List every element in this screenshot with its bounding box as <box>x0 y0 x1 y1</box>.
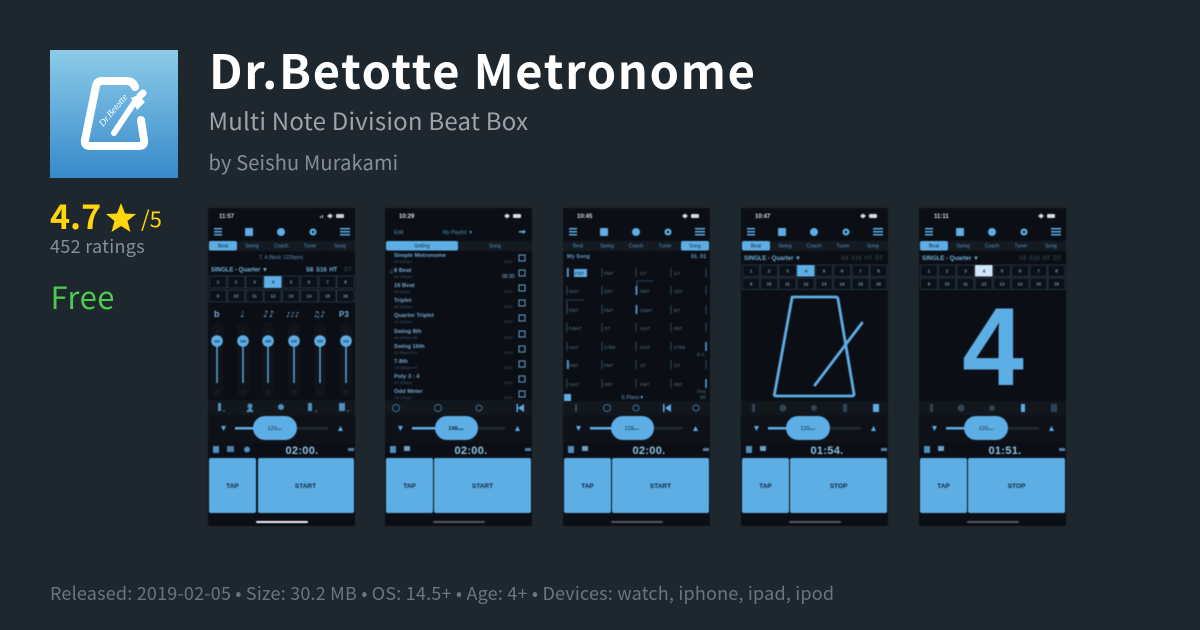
chord chart: Gm7 <box>569 289 579 294</box>
timer row <box>924 445 1065 457</box>
beat grid: 10 <box>233 294 239 298</box>
playlist rows: Odd Meter <box>394 389 423 395</box>
status bar: 11:11 <box>934 214 949 220</box>
tabs: Coach <box>629 244 643 250</box>
volume sliders: v <box>216 389 218 394</box>
beat grid: 9 <box>750 282 753 286</box>
tempo slider <box>398 416 520 440</box>
chord chart: FM7 <box>575 271 585 276</box>
note row: b <box>214 309 220 319</box>
timer row <box>746 445 887 457</box>
volume sliders: ^ <box>293 329 295 334</box>
volume sliders: 100 <box>343 339 349 343</box>
transport icons <box>575 404 699 412</box>
playlist rows: 00:30 <box>502 274 515 280</box>
subtitle: Multi Note Division Beat Box <box>208 102 528 136</box>
volume sliders: ^ <box>267 329 269 334</box>
tabs: Tuner <box>304 244 317 250</box>
playlist rows: Quarter Triplet <box>394 313 434 319</box>
tabs <box>385 241 532 251</box>
chord chart: G7 <box>640 363 647 368</box>
status bar: 11:57 <box>219 214 235 220</box>
chord chart: FM7 <box>604 363 614 368</box>
volume sliders: 100 <box>291 339 297 343</box>
price: Free <box>50 273 115 318</box>
chord chart: FM7 <box>569 363 579 368</box>
beat grid: 3 <box>786 268 789 274</box>
volume sliders: ^ <box>242 329 244 334</box>
volume sliders: 100 <box>265 339 271 343</box>
chord chart: FM7 <box>640 382 650 387</box>
note row: ♪♪ <box>263 310 274 320</box>
volume sliders: ^ <box>319 329 321 334</box>
tempo slider <box>576 416 698 440</box>
tabs: Song <box>1045 244 1057 250</box>
chord chart: Fdim7 <box>569 326 582 331</box>
playlist rows: Simple Metronome <box>394 253 447 259</box>
tabs: Song <box>867 244 879 250</box>
tabs: Swing <box>956 244 970 250</box>
volume sliders: v <box>319 389 321 394</box>
song header: My Song <box>567 254 590 260</box>
beat grid: 7 <box>859 268 862 274</box>
chord chart: FM7 <box>604 308 614 313</box>
timer row <box>390 445 531 457</box>
timer row <box>213 445 354 457</box>
note row: P3 <box>339 310 349 319</box>
beat grid: 16 <box>343 294 348 298</box>
beat grid: 6 <box>841 268 844 274</box>
playlist rows: Swing 8th <box>394 329 422 335</box>
tempo slider: 120bpm <box>800 426 816 432</box>
START button: START <box>650 483 671 490</box>
playlist rows: 4/4 96bpm <box>394 290 410 294</box>
timer row: 02:00. <box>632 445 666 457</box>
mode row <box>211 268 352 274</box>
beat grid: 11 <box>785 282 790 286</box>
playlist rows: Triplet <box>394 298 411 304</box>
beat grid: 3 <box>964 268 967 274</box>
playlist rows: 00:30 <box>504 260 513 264</box>
beat grid: 7 <box>1037 268 1040 274</box>
tabs: Tuner <box>837 244 850 250</box>
home indicator <box>433 521 485 523</box>
tempo slider: 148bpm <box>448 426 464 432</box>
beat grid: 8 <box>344 280 347 284</box>
playlist rows: 00:30 <box>504 305 513 309</box>
chord chart: G7 <box>674 271 681 276</box>
status bar: 10:45 <box>577 214 593 220</box>
playlist rows: Swing 16th <box>394 344 425 350</box>
beat grid: 15 <box>858 282 863 286</box>
rating <box>50 190 162 239</box>
beat grid: 16 <box>876 282 881 286</box>
sound icons <box>218 403 349 412</box>
chord chart: C7b9 <box>674 345 685 350</box>
beat grid <box>920 265 1065 290</box>
tabs <box>208 241 355 251</box>
tabs <box>919 241 1066 251</box>
tabs: Tuner <box>1015 244 1028 250</box>
tempo slider: 120bpm <box>978 426 994 432</box>
beat grid: 10 <box>944 282 950 286</box>
beat grid: 6 <box>1019 268 1022 274</box>
sound label: E.Piano▼ <box>622 395 644 401</box>
timer row <box>568 445 709 457</box>
tabs <box>741 241 888 251</box>
status bar <box>934 214 1055 220</box>
tabs: Coach <box>985 244 999 250</box>
status bar <box>577 214 699 220</box>
beat grid: 7 <box>326 280 329 284</box>
chord chart: Db7 <box>674 382 683 387</box>
note row <box>214 309 349 320</box>
playlist rows: 16 Beat <box>394 283 415 289</box>
playlist rows: 00:30 <box>504 381 513 385</box>
TAP button: TAP <box>937 483 950 490</box>
beat grid: 13 <box>999 282 1005 286</box>
beat grid <box>742 265 887 290</box>
note row: ♪♪♪ <box>286 311 299 319</box>
tabs: Beat <box>218 244 229 250</box>
tabs: Tuner <box>659 244 672 250</box>
volume sliders: 100 <box>317 339 323 343</box>
volume sliders: v <box>345 389 347 394</box>
status bar <box>755 214 877 220</box>
beat grid: 13 <box>821 282 827 286</box>
playlist rows: 8 Beat <box>394 268 411 274</box>
chord chart: Am7 <box>569 345 579 350</box>
tabs: Song <box>334 244 346 250</box>
toolbar icons <box>569 228 705 236</box>
home indicator <box>967 521 1019 523</box>
tabs: Swing <box>600 244 614 250</box>
tempo slider: 120bpm <box>267 426 283 432</box>
beat grid: 5 <box>823 268 826 274</box>
chord chart: G7 <box>604 326 611 331</box>
tempo slider <box>932 416 1054 440</box>
volume sliders: ^ <box>345 329 347 334</box>
playlist rows: 00:30 <box>504 351 513 355</box>
beat grid: 12 <box>803 282 809 286</box>
STOP button: STOP <box>830 483 848 490</box>
beat grid: 10 <box>766 282 772 286</box>
rating: 4.7 <box>50 190 101 239</box>
beat grid: 11 <box>252 294 257 298</box>
beat grid: 9 <box>217 294 220 298</box>
beat grid: 1 <box>928 268 931 274</box>
beat grid: 4 <box>272 280 275 284</box>
tempo slider <box>754 416 876 440</box>
screenshot 3: chord song <box>562 208 710 526</box>
sound icons <box>752 404 879 412</box>
screenshot 4: metronome <box>740 208 888 526</box>
beat grid: 13 <box>288 294 294 298</box>
beat grid: 5 <box>1001 268 1004 274</box>
playlist rows: 4/4 96bpm S16 <box>394 351 417 355</box>
app icon: Dr.Betotte <box>97 93 130 130</box>
ratings count: 452 ratings <box>50 233 145 259</box>
home indicator <box>611 521 663 523</box>
TAP button: TAP <box>226 483 239 490</box>
playlist rows: 00:30 <box>504 290 513 294</box>
chord chart: G7 <box>674 363 681 368</box>
tabs: Swing <box>245 244 259 250</box>
beat grid: 1 <box>217 280 220 284</box>
toolbar icons <box>214 228 350 236</box>
beat grid: 14 <box>839 282 845 286</box>
beat grid: 8 <box>1055 268 1058 274</box>
volume sliders <box>211 322 352 398</box>
TAP button <box>209 458 256 513</box>
TAP button <box>564 458 611 513</box>
tempo slider <box>221 416 343 440</box>
beat grid: 11 <box>963 282 968 286</box>
beat grid: 14 <box>1017 282 1023 286</box>
mode row: DT <box>344 268 352 274</box>
chord chart: Gb7 <box>604 382 613 387</box>
beat grid: 9 <box>928 282 931 286</box>
chord chart: G7b9 <box>604 345 616 350</box>
volume sliders: v <box>267 389 269 394</box>
STOP button <box>790 458 887 513</box>
beat grid <box>210 276 354 302</box>
tabs: Beat <box>573 244 584 250</box>
chord chart: FM7 <box>604 271 614 276</box>
status bar: 10:29 <box>399 214 415 220</box>
playlist rows: 00:30 <box>504 320 513 324</box>
chord chart: G7 <box>640 271 647 276</box>
volume sliders: ^ <box>216 329 218 334</box>
playlist rows: 4/4 120bpm <box>394 260 412 264</box>
screenshot 5: big beat number <box>918 208 1066 526</box>
playlist rows: 7/8 180bpm HT <box>394 366 417 370</box>
mode row <box>744 256 883 262</box>
tabs: Song <box>689 244 701 250</box>
beat grid: 1 <box>750 268 753 274</box>
TAP button: TAP <box>759 483 772 490</box>
beat grid: 6 <box>308 280 311 284</box>
author: by Seishu Murakami <box>208 147 398 176</box>
chord chart: Gm7 <box>569 382 579 387</box>
volume sliders: 100 <box>240 339 246 343</box>
playlist rows <box>389 253 525 400</box>
status bar <box>219 214 344 220</box>
title: Dr.Betotte Metronome <box>209 34 757 103</box>
beat grid: 5 <box>290 280 293 284</box>
playlist rows: 7/8 100bpm <box>394 396 412 400</box>
beat grid: 2 <box>946 268 949 274</box>
playlist header: Edit <box>394 230 404 236</box>
beat grid: 14 <box>306 294 312 298</box>
chord chart: FM7 <box>640 289 650 294</box>
beat grid: 15 <box>325 294 330 298</box>
note row: ♩ <box>240 310 244 320</box>
screenshot 1: beat mixer <box>208 208 356 526</box>
sound label: ±0 <box>700 395 706 401</box>
tabs <box>563 241 710 251</box>
START button <box>434 458 531 513</box>
chord chart: Gb7 <box>604 289 613 294</box>
beat grid: 3 <box>253 280 256 284</box>
mode row: S8 S16 HT DT <box>841 256 883 262</box>
chord chart: D.C. <box>697 352 706 357</box>
STOP button: STOP <box>1008 483 1026 490</box>
chord chart: Gm7 <box>640 345 650 350</box>
TAP button <box>920 458 967 513</box>
song header: 01. 01 <box>691 254 706 260</box>
mode row: SINGLE - Quarter ▼ <box>922 256 979 262</box>
transport icons <box>392 404 524 412</box>
TAP button: TAP <box>403 483 416 490</box>
START button: START <box>472 483 493 490</box>
playlist rows: 00:30 <box>504 336 513 340</box>
beat grid: 2 <box>768 268 771 274</box>
START button: START <box>295 483 316 490</box>
playlist rows: 4/4 100bpm <box>394 320 412 324</box>
chord chart: FM7 <box>569 308 579 313</box>
rating: /5 <box>141 202 162 234</box>
chord chart: Fine <box>697 389 706 394</box>
volume sliders: 100 <box>214 339 220 343</box>
note row: ♫♪ <box>313 310 325 319</box>
chord chart: Eb7 <box>674 326 683 331</box>
playlist header <box>394 230 526 236</box>
sound label <box>564 394 706 401</box>
tabs: Coach <box>274 244 288 250</box>
playlist rows: 4/4 148bpm <box>394 275 412 279</box>
status bar: 10:47 <box>755 214 771 220</box>
playlist rows: 00:30 <box>504 396 513 400</box>
beat grid: 16 <box>1054 282 1059 286</box>
sound icons <box>930 404 1057 412</box>
playlist rows: 4/4 100bpm <box>394 381 412 385</box>
tabs: Setting <box>414 244 430 250</box>
START button <box>612 458 709 513</box>
app icon <box>50 50 178 178</box>
chord chart: Gm7 <box>640 326 650 331</box>
big beat number: 4 <box>962 285 1024 409</box>
playlist rows: Poly 3 : 4 <box>394 374 420 380</box>
TAP button <box>386 458 433 513</box>
timer row: 02:00. <box>454 445 488 457</box>
volume sliders: v <box>242 389 244 394</box>
home indicator <box>256 521 308 523</box>
mode row: SINGLE - Quarter ▼ <box>211 268 268 274</box>
tabs: Beat <box>929 244 940 250</box>
metronome graphic <box>774 297 862 396</box>
tabs: Song <box>489 244 501 250</box>
chord chart: Gb7 <box>674 289 683 294</box>
beat grid: 12 <box>981 282 987 286</box>
toolbar icons <box>925 228 1061 236</box>
START button <box>258 458 354 513</box>
chord chart <box>567 268 706 394</box>
beat grid: 2 <box>235 280 238 284</box>
tabs: Coach <box>807 244 821 250</box>
footer metadata: Released: 2019-02-05 • Size: 30.2 MB • OS: 14.5+ • Age: 4+ • Devices: watch, iphone, ipad, ipod <box>50 580 834 606</box>
timer row: 01:51. <box>988 445 1022 457</box>
playlist rows: ♫ <box>389 269 393 275</box>
chord chart: B7 <box>674 308 680 313</box>
screenshot 2: playlist <box>384 208 532 526</box>
toolbar icons <box>747 228 883 236</box>
beat grid: 12 <box>270 294 276 298</box>
tabs: Beat <box>751 244 762 250</box>
chord chart: GbM7 <box>640 308 653 313</box>
beat grid: 15 <box>1036 282 1041 286</box>
timer row: 01:54. <box>810 445 844 457</box>
TAP button: TAP <box>581 483 594 490</box>
playlist rows: 4/4 144bpm S8 <box>394 336 417 340</box>
tempo slider: 128bpm <box>624 426 640 432</box>
STOP button <box>968 458 1065 513</box>
playlist rows: 00:30 <box>504 366 513 370</box>
song header <box>567 254 706 260</box>
playlist rows: 7-8th <box>394 359 408 365</box>
status bar <box>399 214 521 220</box>
timer row: 02:00. <box>286 445 318 457</box>
tabs: Swing <box>778 244 792 250</box>
volume sliders: v <box>293 389 295 394</box>
mode row <box>922 256 1061 262</box>
next label: 7. 4 (Next: 122bpm) <box>259 255 303 261</box>
beat grid: 4 <box>805 268 808 274</box>
TAP button <box>742 458 789 513</box>
home indicator <box>789 521 841 523</box>
mode row: S8 S16 HT DT <box>1019 256 1061 262</box>
beat grid: 4 <box>983 268 986 274</box>
playlist rows: 4/4 100bpm <box>394 305 412 309</box>
playlist header: My Playlist ▼ <box>443 230 473 236</box>
beat grid: 8 <box>877 268 880 274</box>
mode row: S8 S16 HT <box>306 268 338 274</box>
mode row: SINGLE - Quarter ▼ <box>744 256 801 262</box>
